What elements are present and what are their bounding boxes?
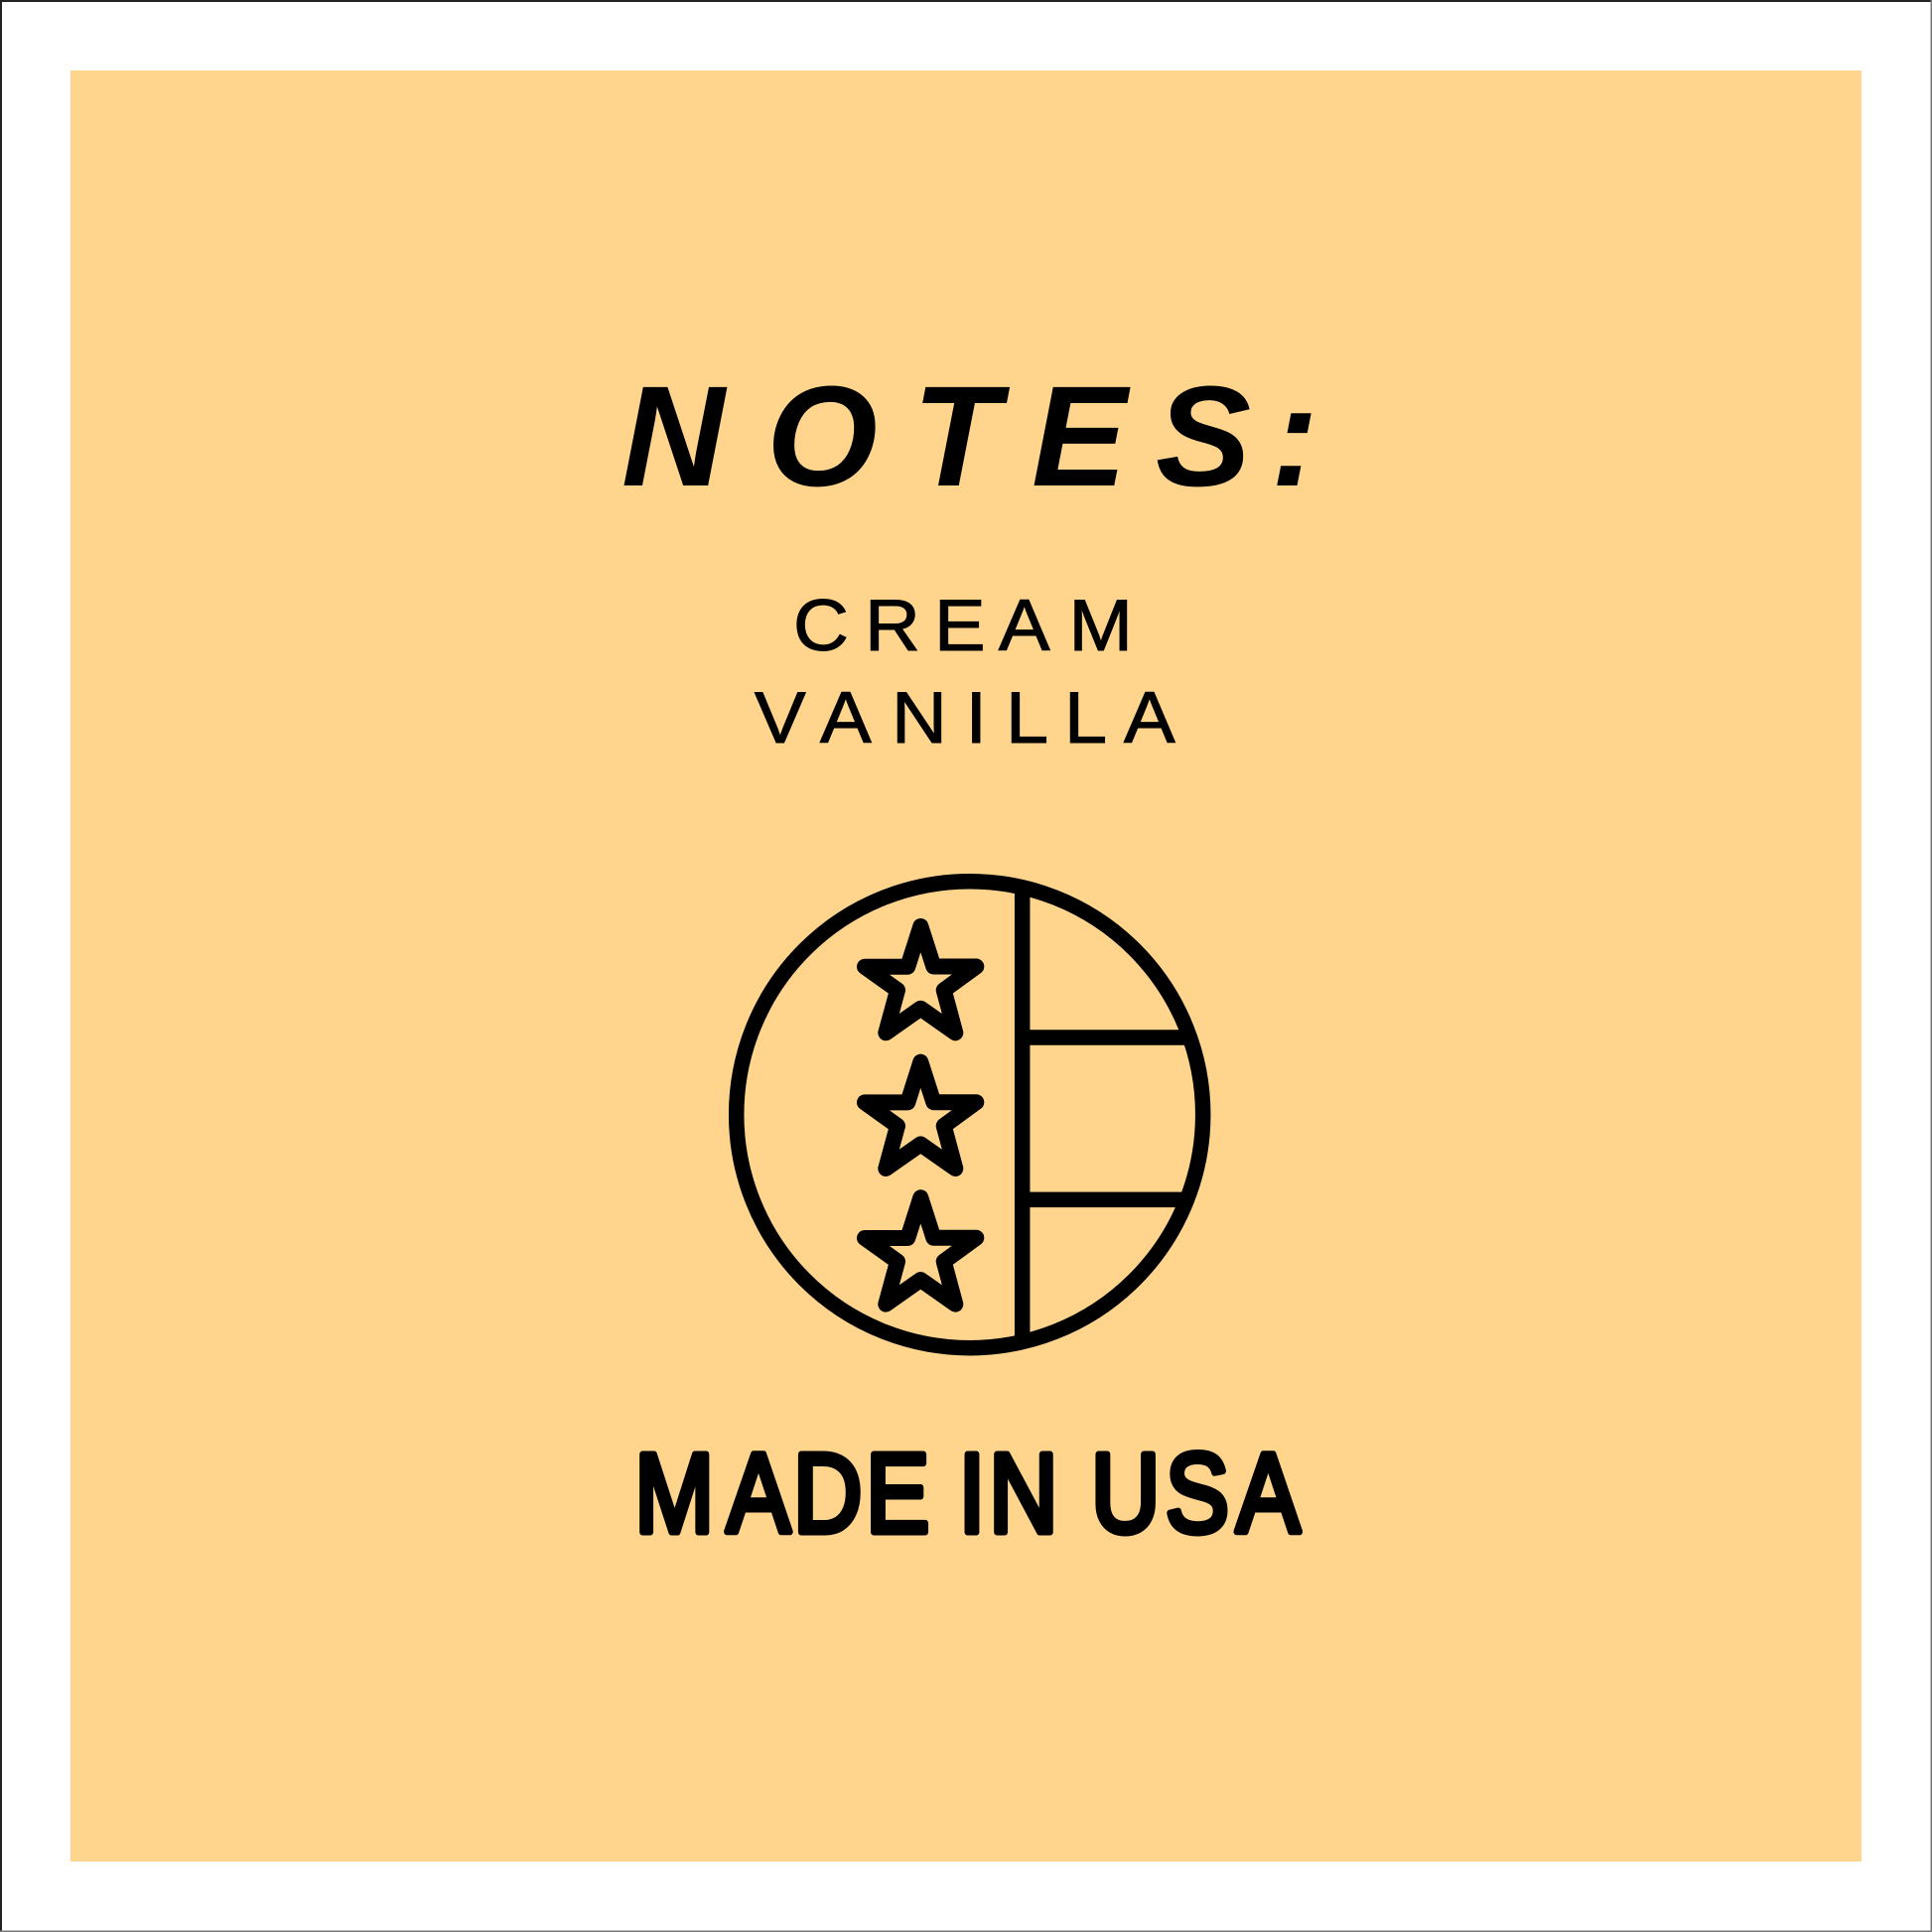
star 1	[865, 926, 976, 1033]
icon: american flag globe badge	[737, 882, 1203, 1348]
badge circle	[737, 882, 1203, 1348]
caption: made in usa: MADE IN USA	[634, 1432, 1300, 1557]
heading: notes: NOTES:	[621, 356, 1318, 516]
text block: flavour notes	[755, 585, 1175, 759]
note: cream: CREAM	[793, 585, 1133, 666]
flag stripes	[1023, 887, 1190, 1342]
star 3	[865, 1197, 976, 1305]
note: vanilla: VANILLA	[755, 677, 1175, 759]
stars	[865, 926, 976, 1305]
star 2	[865, 1062, 976, 1169]
